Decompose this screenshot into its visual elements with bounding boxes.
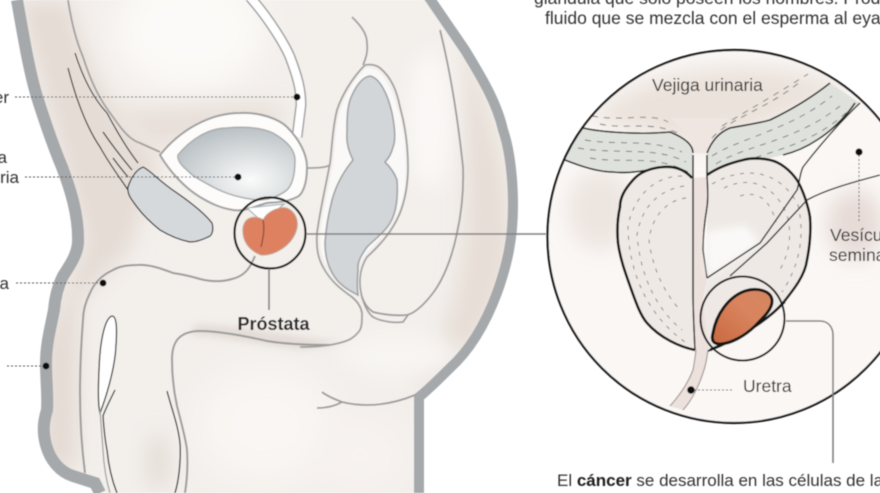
rectum wall xyxy=(300,65,408,347)
urethra channel top xyxy=(693,146,707,153)
pubic bone xyxy=(128,167,213,242)
bladder interior xyxy=(178,127,295,200)
text: top explanatory paragraph xyxy=(534,0,880,28)
gluteal crease xyxy=(317,392,415,408)
male pelvis cross-section xyxy=(0,0,546,493)
inner buttock line xyxy=(362,30,463,315)
small tumour circle xyxy=(700,276,784,360)
callout: left labels and dotted leaders: ria xyxy=(0,168,20,187)
panel: enlarged prostate circle xyxy=(547,50,880,463)
dark muscle lines xyxy=(68,53,138,190)
bladder wall band xyxy=(560,83,860,178)
label: Próstata: Próstata xyxy=(237,314,310,334)
urethra lines xyxy=(693,155,708,350)
perineum and thigh line xyxy=(172,331,330,493)
callout: left labels and dotted leaders xyxy=(0,88,300,369)
prostate gland texture xyxy=(628,173,801,342)
white band behind abdomen xyxy=(250,0,301,137)
text: cancer caption: El cáncer se desarrolla en las células de la xyxy=(557,471,880,490)
cancer leader line xyxy=(786,321,833,463)
seminal vesicle pointer xyxy=(855,148,863,222)
bladder wall xyxy=(160,113,307,210)
rectum interior xyxy=(325,76,397,295)
bladder wall texture xyxy=(578,74,847,172)
lower urethra xyxy=(670,350,708,410)
circle interior anatomy xyxy=(560,66,880,410)
urethra through gland xyxy=(670,177,708,410)
body silhouette and skin shading xyxy=(0,0,530,493)
connector behind bladder xyxy=(307,165,330,168)
urethra upper line xyxy=(80,256,255,473)
label: Vejiga urinaria: Vejiga urinaria xyxy=(652,75,763,95)
prostate leader lines xyxy=(269,234,546,310)
line over tumour edge xyxy=(708,302,785,351)
cancer tumour xyxy=(712,289,772,344)
outline: left side of body xyxy=(17,0,100,493)
rectum white band xyxy=(320,68,405,295)
seminal duct xyxy=(707,103,880,278)
prostate gland outline xyxy=(617,158,810,350)
triangle between ducts xyxy=(706,225,760,278)
label: Vesícula seminal xyxy=(829,225,880,265)
colon line xyxy=(352,17,367,65)
label: Uretra: Uretra xyxy=(743,376,792,396)
bladder wall edges xyxy=(565,83,855,173)
urethra pointer xyxy=(687,386,732,394)
prostate side view xyxy=(234,198,306,268)
prostate gland body xyxy=(617,158,810,350)
scrotum lines xyxy=(100,390,180,493)
circle shading xyxy=(568,66,880,260)
white urethra opening xyxy=(98,316,117,413)
peritoneum line xyxy=(68,0,160,152)
big circle outline xyxy=(548,50,880,423)
outline: right side of body xyxy=(419,0,513,493)
